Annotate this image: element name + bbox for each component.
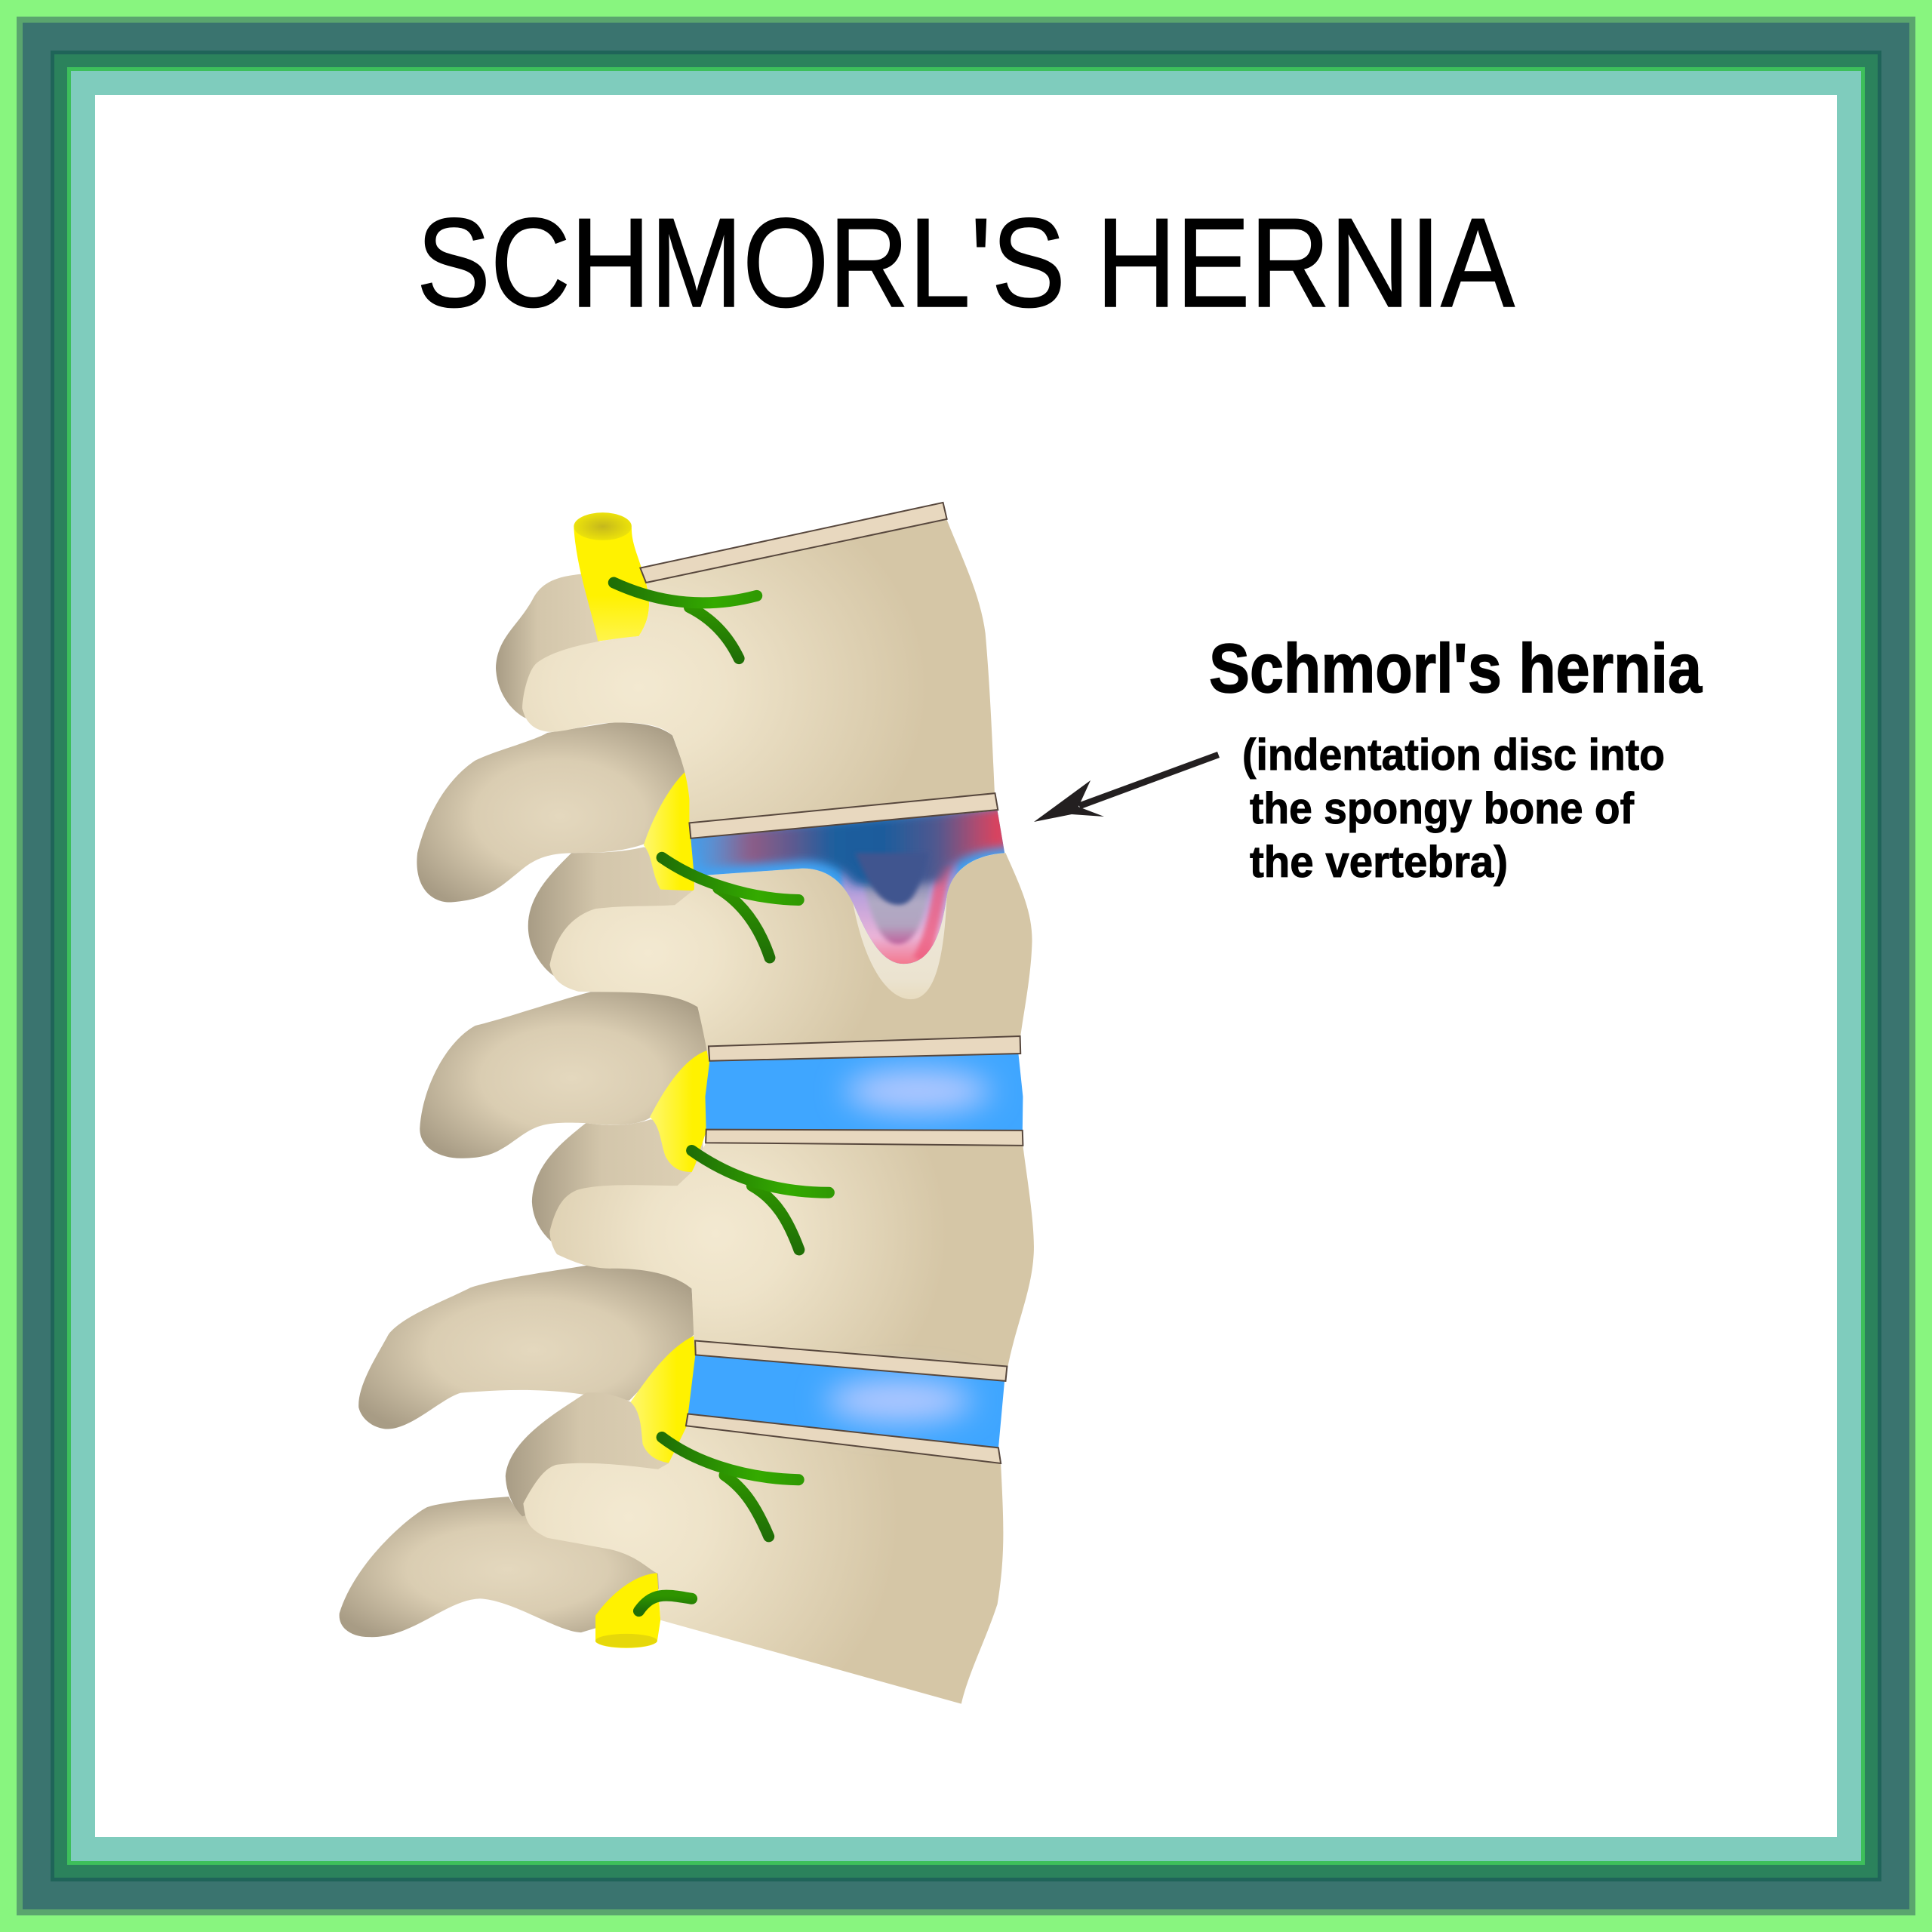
yellow cord wedge 4	[631, 1336, 697, 1463]
callout description: the spongy bone of	[1250, 784, 1635, 833]
small facet process 3	[532, 1119, 706, 1243]
spinous process 2	[417, 723, 692, 903]
endplate 4 top	[695, 1341, 1007, 1381]
vertebra 4 body	[523, 1426, 1003, 1704]
callout description: the vertebra)	[1250, 838, 1508, 887]
disc color glow	[691, 811, 1004, 964]
disc 3	[705, 1051, 1023, 1133]
vertebral bodies and discs, upper part	[522, 503, 1032, 1061]
small facet process 4	[506, 1392, 692, 1516]
endplate 2 top	[689, 793, 998, 838]
spinous process 3	[420, 992, 711, 1158]
callout description: (indentation disc into	[1242, 731, 1665, 780]
posterior processes, upper part	[417, 512, 701, 976]
title: SCHMORL'S HERNIA	[417, 192, 1515, 334]
vertebra 1 body	[522, 520, 995, 824]
vertebra 2 body	[549, 853, 1032, 1061]
cord bottom segment	[595, 1573, 660, 1648]
endplate 1 top	[640, 503, 947, 583]
vertebra 3 body	[549, 1143, 1034, 1371]
nerve 2	[662, 857, 798, 958]
posterior processes, lower part	[340, 992, 711, 1648]
disc base	[691, 811, 1004, 964]
endplate 4 bottom	[686, 1414, 1001, 1463]
nerve 1	[614, 583, 757, 659]
disc 4	[688, 1352, 1004, 1449]
spinous process 4	[358, 1265, 694, 1429]
nerve 3	[692, 1150, 829, 1250]
arrow pointing at hernia	[1034, 752, 1220, 822]
vertebral bodies and discs, lower part	[523, 1036, 1034, 1704]
yellow cord wedge 3	[650, 1050, 711, 1172]
nerves, lower part	[638, 1150, 829, 1611]
small facet process 1	[496, 574, 600, 718]
callout description	[1242, 731, 1665, 887]
spinal cord top segment	[574, 512, 649, 641]
hernia indentation cream halo	[853, 895, 947, 999]
nerve 5	[638, 1595, 692, 1611]
spine illustration	[340, 503, 1034, 1704]
disc with Schmorl's hernia	[687, 807, 1010, 972]
callout heading: Schmorl's hernia	[1209, 630, 1703, 707]
endplate 3 top	[709, 1036, 1020, 1061]
nerves, upper part	[614, 583, 798, 958]
endplate 3 bottom	[706, 1130, 1023, 1146]
nerve 4	[662, 1437, 798, 1537]
small facet process 2	[528, 848, 701, 976]
spinous process 5	[340, 1497, 663, 1637]
yellow cord wedge 2	[644, 771, 697, 891]
